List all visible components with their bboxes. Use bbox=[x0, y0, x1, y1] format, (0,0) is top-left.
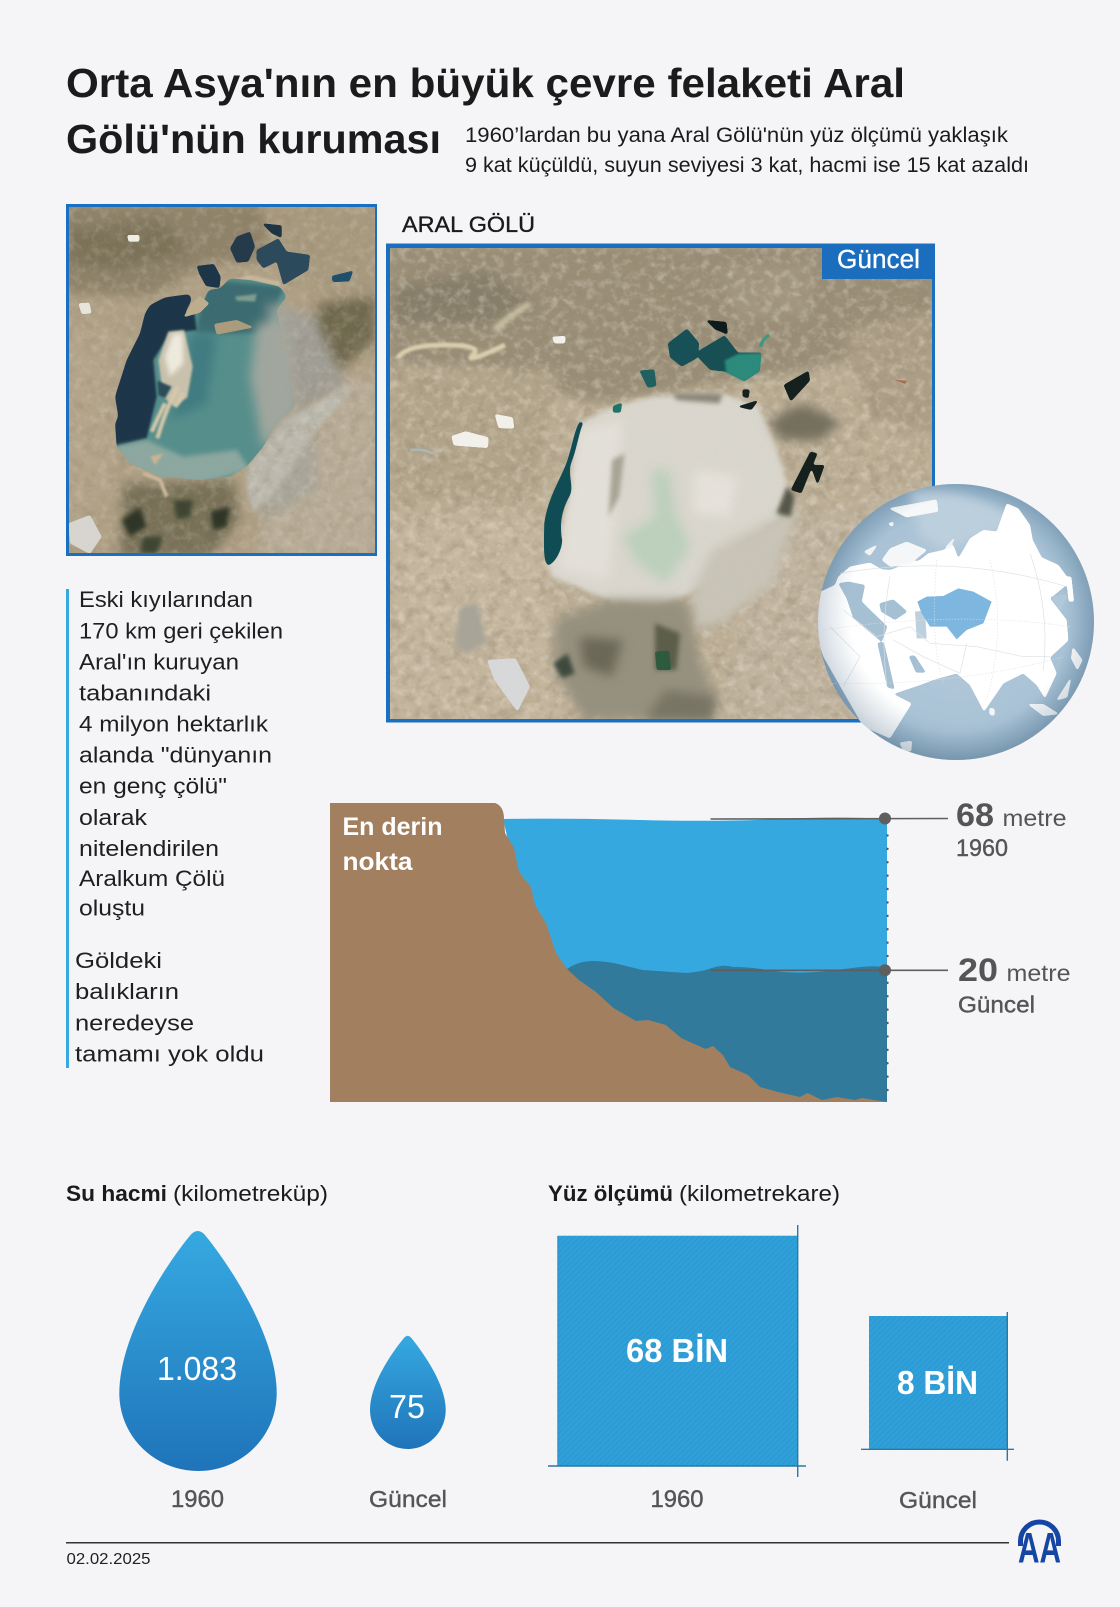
NE wetlands bbox=[769, 403, 841, 440]
text block with side bar: alanda "dünyanın bbox=[79, 742, 272, 768]
main lake bbox=[115, 278, 294, 480]
marker current bbox=[710, 964, 948, 976]
label: drop year: 1960 bbox=[171, 1486, 224, 1513]
icon: water drop 1960 bbox=[119, 1231, 277, 1471]
icon: agency logo: AA bbox=[1018, 1524, 1061, 1572]
text block with side bar: Aral'ın kuruyan bbox=[79, 650, 239, 674]
globe locator bbox=[813, 484, 1094, 760]
label: 68 metre 1960: 68 bbox=[956, 797, 994, 833]
lake bed terrain bbox=[330, 803, 887, 1102]
title: Orta Asya'nın en büyük çevre felaketi Aral bbox=[66, 60, 905, 106]
dried seabed bbox=[548, 393, 787, 607]
square: surface current: 8 BİN bbox=[897, 1364, 978, 1401]
text block with side bar: tabanındaki bbox=[79, 680, 211, 706]
text block with side bar: neredeyse bbox=[75, 1010, 194, 1036]
label: drop current: Güncel bbox=[369, 1486, 447, 1512]
icon: water drop 1960: 1.083 bbox=[157, 1350, 237, 1387]
text block with side bar: balıkların bbox=[75, 979, 179, 1004]
sphere shading bbox=[818, 484, 1094, 760]
Kazakhstan and Aral region bbox=[915, 611, 927, 638]
text block with side bar bbox=[66, 587, 283, 1068]
label: 20 metre Güncel: 20 bbox=[958, 952, 998, 988]
icon: water drop current: 75 bbox=[389, 1388, 425, 1425]
label: En derin nokta bbox=[342, 813, 442, 876]
title bbox=[66, 60, 905, 162]
heading: surface area: Yüz ölçümü bbox=[548, 1181, 673, 1206]
square: surface 1960: 68 BİN bbox=[626, 1332, 728, 1369]
heading: water volume: Su hacmi bbox=[66, 1181, 167, 1206]
icon: water drop current bbox=[370, 1336, 446, 1449]
panel: 1960 satellite map bbox=[63, 203, 380, 557]
label: 68 metre 1960: 1960 bbox=[956, 835, 1008, 862]
icon: agency logo bbox=[1018, 1522, 1061, 1572]
salt flats bbox=[451, 431, 489, 448]
text block with side bar: tamamı yok oldu bbox=[75, 1042, 264, 1066]
footer rule and date: 02.02.2025 bbox=[66, 1551, 151, 1568]
title: Gölü'nün kuruması bbox=[66, 116, 441, 162]
text block with side bar: Göldeki bbox=[75, 948, 162, 973]
square: surface 1960 bbox=[548, 1225, 806, 1477]
text block with side bar: 4 milyon hektarlık bbox=[79, 712, 269, 736]
heading: surface area bbox=[548, 1181, 840, 1206]
label: 20 metre Güncel: metre bbox=[1006, 960, 1070, 986]
marker 1960 bbox=[710, 812, 948, 824]
lakes bbox=[613, 320, 761, 413]
seas bbox=[838, 582, 1068, 689]
heading: surface area: (kilometrekare) bbox=[679, 1181, 840, 1206]
text block with side bar: Eski kıyılarından bbox=[79, 587, 253, 612]
north basin bbox=[197, 223, 353, 288]
label: 20 metre Güncel: Güncel bbox=[958, 992, 1035, 1018]
label: 20 metre Güncel bbox=[958, 952, 1070, 1018]
label: 68 metre 1960: metre bbox=[1002, 805, 1066, 831]
label: square current: Güncel bbox=[899, 1487, 977, 1513]
water 1960 bbox=[503, 818, 887, 975]
label: En derin nokta: nokta bbox=[342, 848, 414, 876]
heading: water volume bbox=[66, 1181, 328, 1206]
text block with side bar: Aralkum Çölü bbox=[79, 866, 225, 891]
text block with side bar: nitelendirilen bbox=[79, 836, 219, 861]
subtitle text bbox=[465, 124, 1029, 177]
subtitle text: 1960’lardan bu yana Aral Gölü'nün yüz ölçümü yaklaşık bbox=[465, 124, 1009, 147]
text block with side bar: 170 km geri çekilen bbox=[79, 618, 283, 644]
depth cross-section chart bbox=[330, 803, 948, 1102]
label: square year: 1960 bbox=[650, 1486, 704, 1513]
badge: Güncel bbox=[822, 244, 935, 279]
land bbox=[813, 499, 1083, 752]
label: 68 metre 1960 bbox=[956, 797, 1066, 862]
badge: Güncel: Güncel bbox=[837, 246, 920, 274]
heading: water volume: (kilometreküp) bbox=[173, 1181, 328, 1206]
panel: current satellite map bbox=[380, 240, 940, 727]
south delta bbox=[555, 600, 716, 720]
text block with side bar: oluştu bbox=[79, 896, 145, 920]
text block with side bar: olarak bbox=[79, 805, 148, 830]
subtitle text: 9 kat küçüldü, suyun seviyesi 3 kat, hacmi ise 15 kat azaldı bbox=[465, 154, 1029, 177]
grid and borders bbox=[823, 553, 1070, 700]
square: surface current bbox=[861, 1312, 1014, 1461]
heading: Aral Gölü: ARAL GÖLÜ bbox=[402, 212, 535, 237]
label: En derin nokta: En derin bbox=[342, 813, 442, 841]
text block with side bar: en genç çölü" bbox=[79, 774, 227, 798]
